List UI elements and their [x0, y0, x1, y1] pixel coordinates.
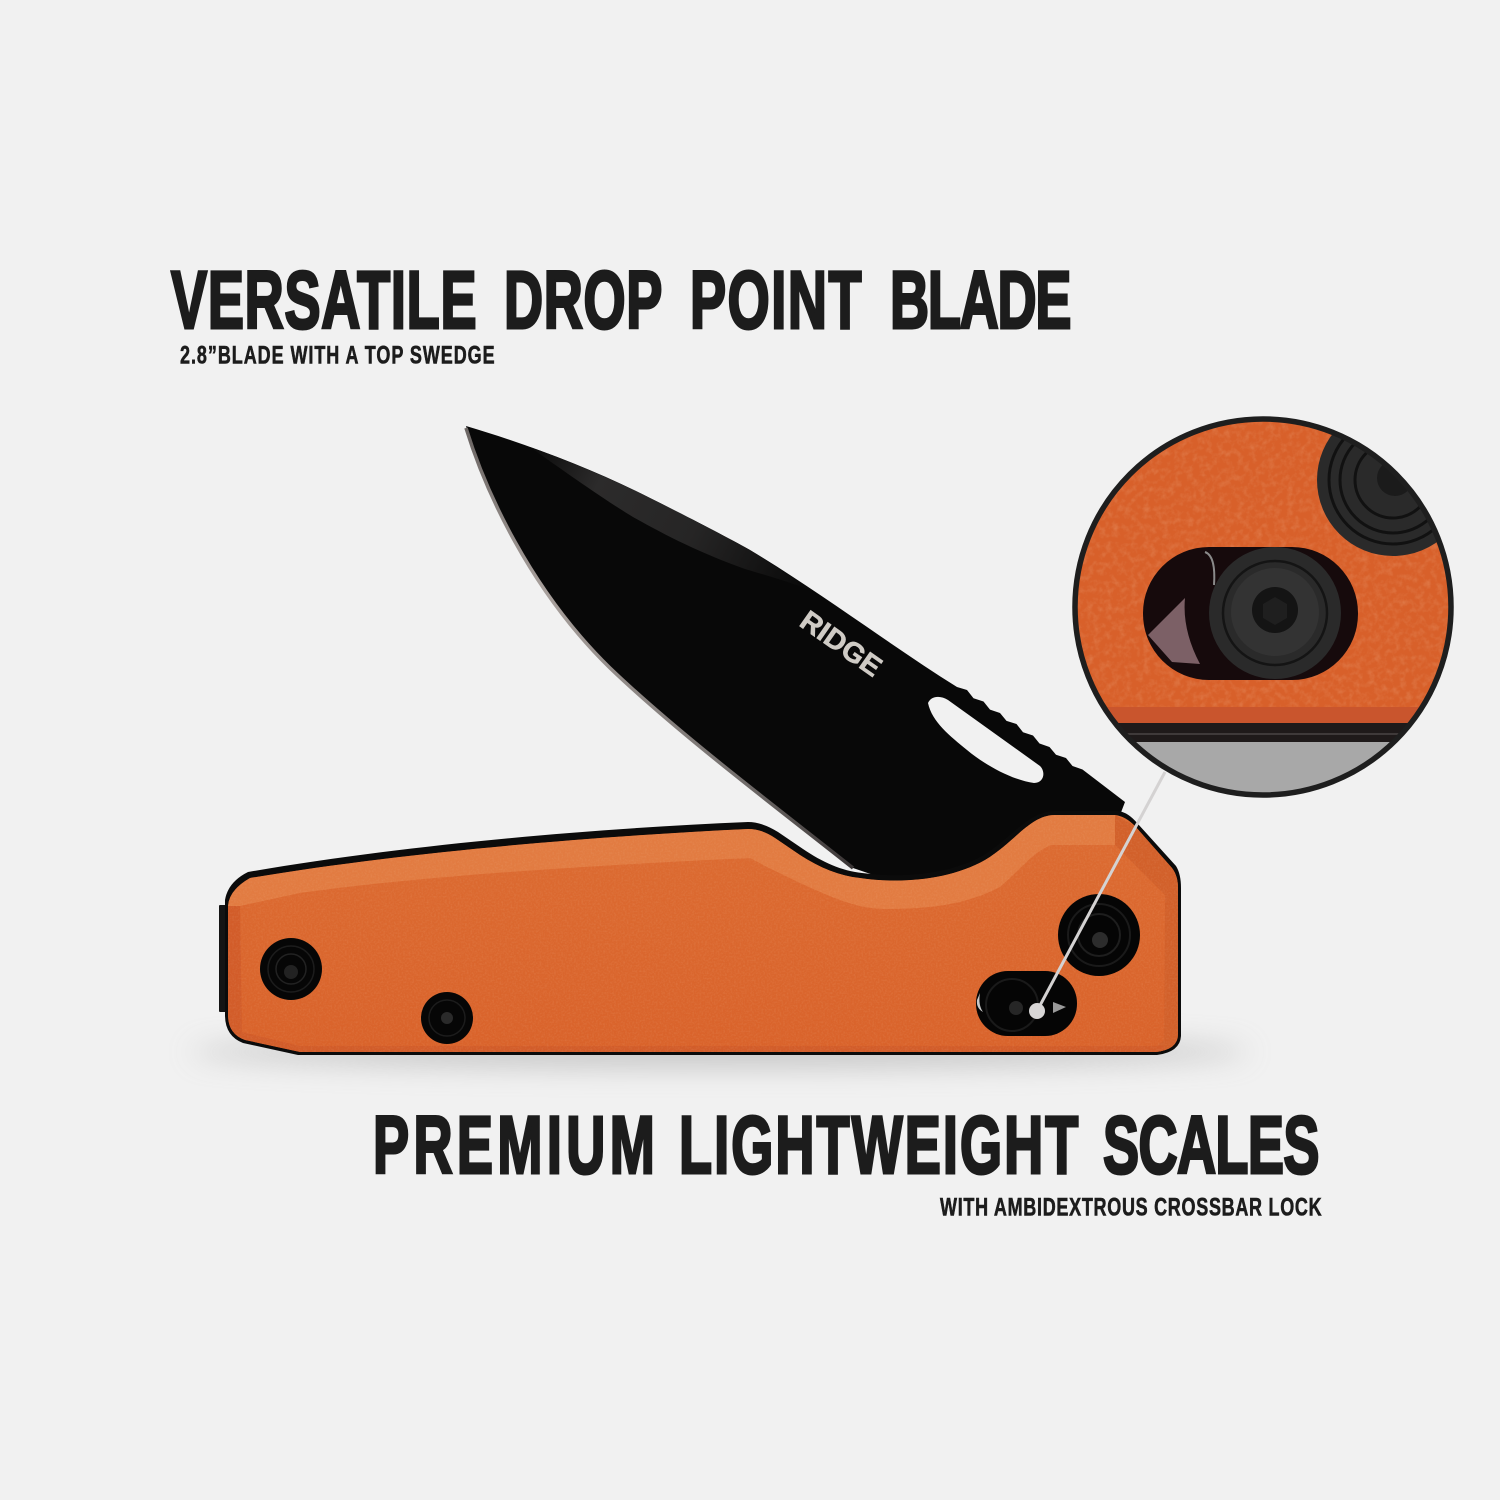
heading: premium lightweight scales: LIGHTWEIGHT	[679, 1099, 1078, 1191]
heading: versatile drop point blade	[171, 254, 1072, 346]
heading: premium lightweight scales	[373, 1099, 1319, 1191]
handle liner and pocket clip	[219, 811, 1181, 1055]
heading: versatile drop point blade: VERSATILE	[171, 254, 477, 346]
handle side bevel	[1115, 815, 1178, 1052]
screw: rear large	[260, 938, 322, 1000]
handle top bevel	[228, 815, 1115, 909]
handle scale	[220, 810, 1185, 1060]
screw: rear small	[421, 992, 473, 1044]
subheading: lock detail: WITH AMBIDEXTROUS CROSSBAR LOCK	[940, 1193, 1322, 1221]
callout: lock zoom inset	[1070, 404, 1469, 802]
heading: premium lightweight scales: PREMIUM	[373, 1099, 655, 1191]
inset orange scale	[1070, 415, 1460, 710]
blade finger slot	[928, 697, 1043, 783]
inset top-right screw	[1317, 435, 1436, 556]
crossbar lock slot	[976, 971, 1077, 1036]
heading: versatile drop point blade: DROP	[504, 254, 662, 346]
subheading: blade detail: 2.8”BLADE WITH A TOP SWEDGE	[180, 341, 495, 369]
inset lower edge	[1107, 707, 1419, 723]
blade	[466, 426, 1125, 884]
screw: pivot	[1058, 894, 1140, 976]
blade logo: RIDGE	[795, 605, 888, 683]
heading: versatile drop point blade: POINT	[690, 254, 862, 346]
knife illustration	[219, 426, 1185, 1060]
callout leader line	[1029, 772, 1165, 1019]
heading: versatile drop point blade: BLADE	[890, 254, 1072, 346]
heading: premium lightweight scales: SCALES	[1103, 1099, 1319, 1191]
knife shadow	[190, 1037, 1250, 1067]
inset lock slot	[1143, 547, 1358, 680]
